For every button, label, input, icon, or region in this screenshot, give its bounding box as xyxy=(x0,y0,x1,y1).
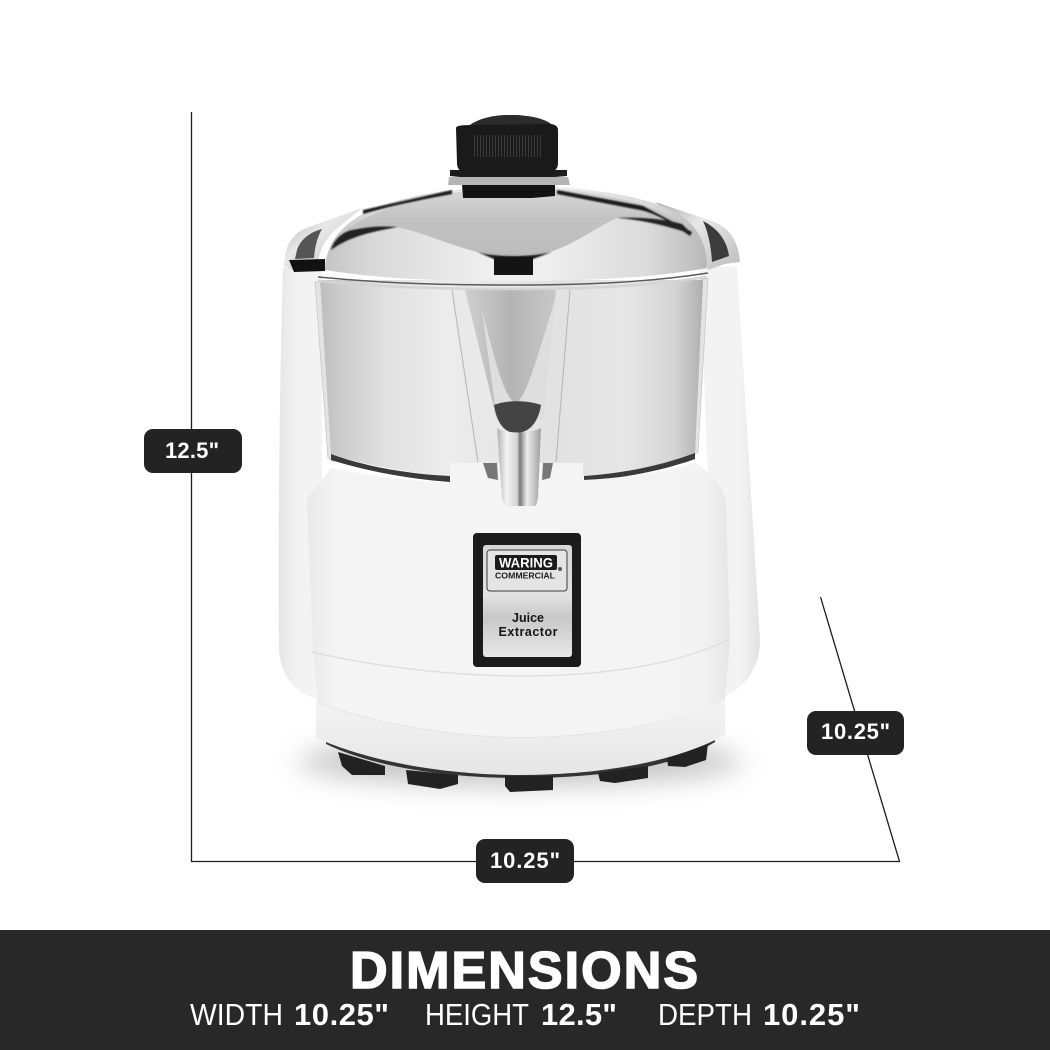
height spec: 12.5" xyxy=(541,997,617,1032)
lid rim xyxy=(318,273,708,285)
left shoulder trim xyxy=(284,208,362,272)
depth spec: 10.25" xyxy=(763,997,860,1032)
depth spec: DEPTH xyxy=(658,997,752,1032)
front base body xyxy=(307,463,730,737)
stainless bowl xyxy=(320,280,703,482)
logo box: COMMERCIAL xyxy=(495,570,555,580)
width spec: WIDTH xyxy=(190,997,283,1032)
lid central reflection xyxy=(346,190,680,255)
floor shadow xyxy=(298,738,742,786)
footer heading: DIMENSIONS xyxy=(350,942,698,1000)
spout xyxy=(497,428,541,506)
bowl lower rim xyxy=(331,454,450,482)
height spec: HEIGHT xyxy=(425,997,529,1032)
width spec xyxy=(190,997,389,1032)
nameplate: Extractor xyxy=(498,625,558,639)
lid dark reflections xyxy=(331,190,692,259)
logo box xyxy=(487,550,567,591)
dimension lines xyxy=(192,112,900,862)
black knob xyxy=(448,115,570,198)
product: juice extractor xyxy=(279,115,760,792)
rear housing posts xyxy=(279,266,760,700)
underside shade xyxy=(326,730,715,778)
badge: depth xyxy=(807,711,904,755)
depth spec xyxy=(658,997,860,1032)
badge: height xyxy=(144,429,242,473)
logo box: WARING xyxy=(499,554,553,570)
base ring xyxy=(316,695,725,775)
spout bracket shadows xyxy=(483,463,553,480)
width spec: 10.25" xyxy=(294,997,389,1032)
badge: height: 12.5" xyxy=(165,438,219,463)
badge: width xyxy=(476,839,574,883)
clear juice chute xyxy=(452,290,570,462)
right shoulder trim xyxy=(655,202,740,270)
badge: depth: 10.25" xyxy=(821,719,890,744)
height spec xyxy=(425,997,617,1032)
chrome lid xyxy=(318,186,708,289)
nameplate: Juice xyxy=(512,611,544,625)
rubber feet xyxy=(338,744,708,792)
footer band xyxy=(0,930,1050,1050)
clear glass collar xyxy=(315,278,708,462)
badge: width: 10.25" xyxy=(490,848,560,873)
nameplate xyxy=(473,533,581,667)
